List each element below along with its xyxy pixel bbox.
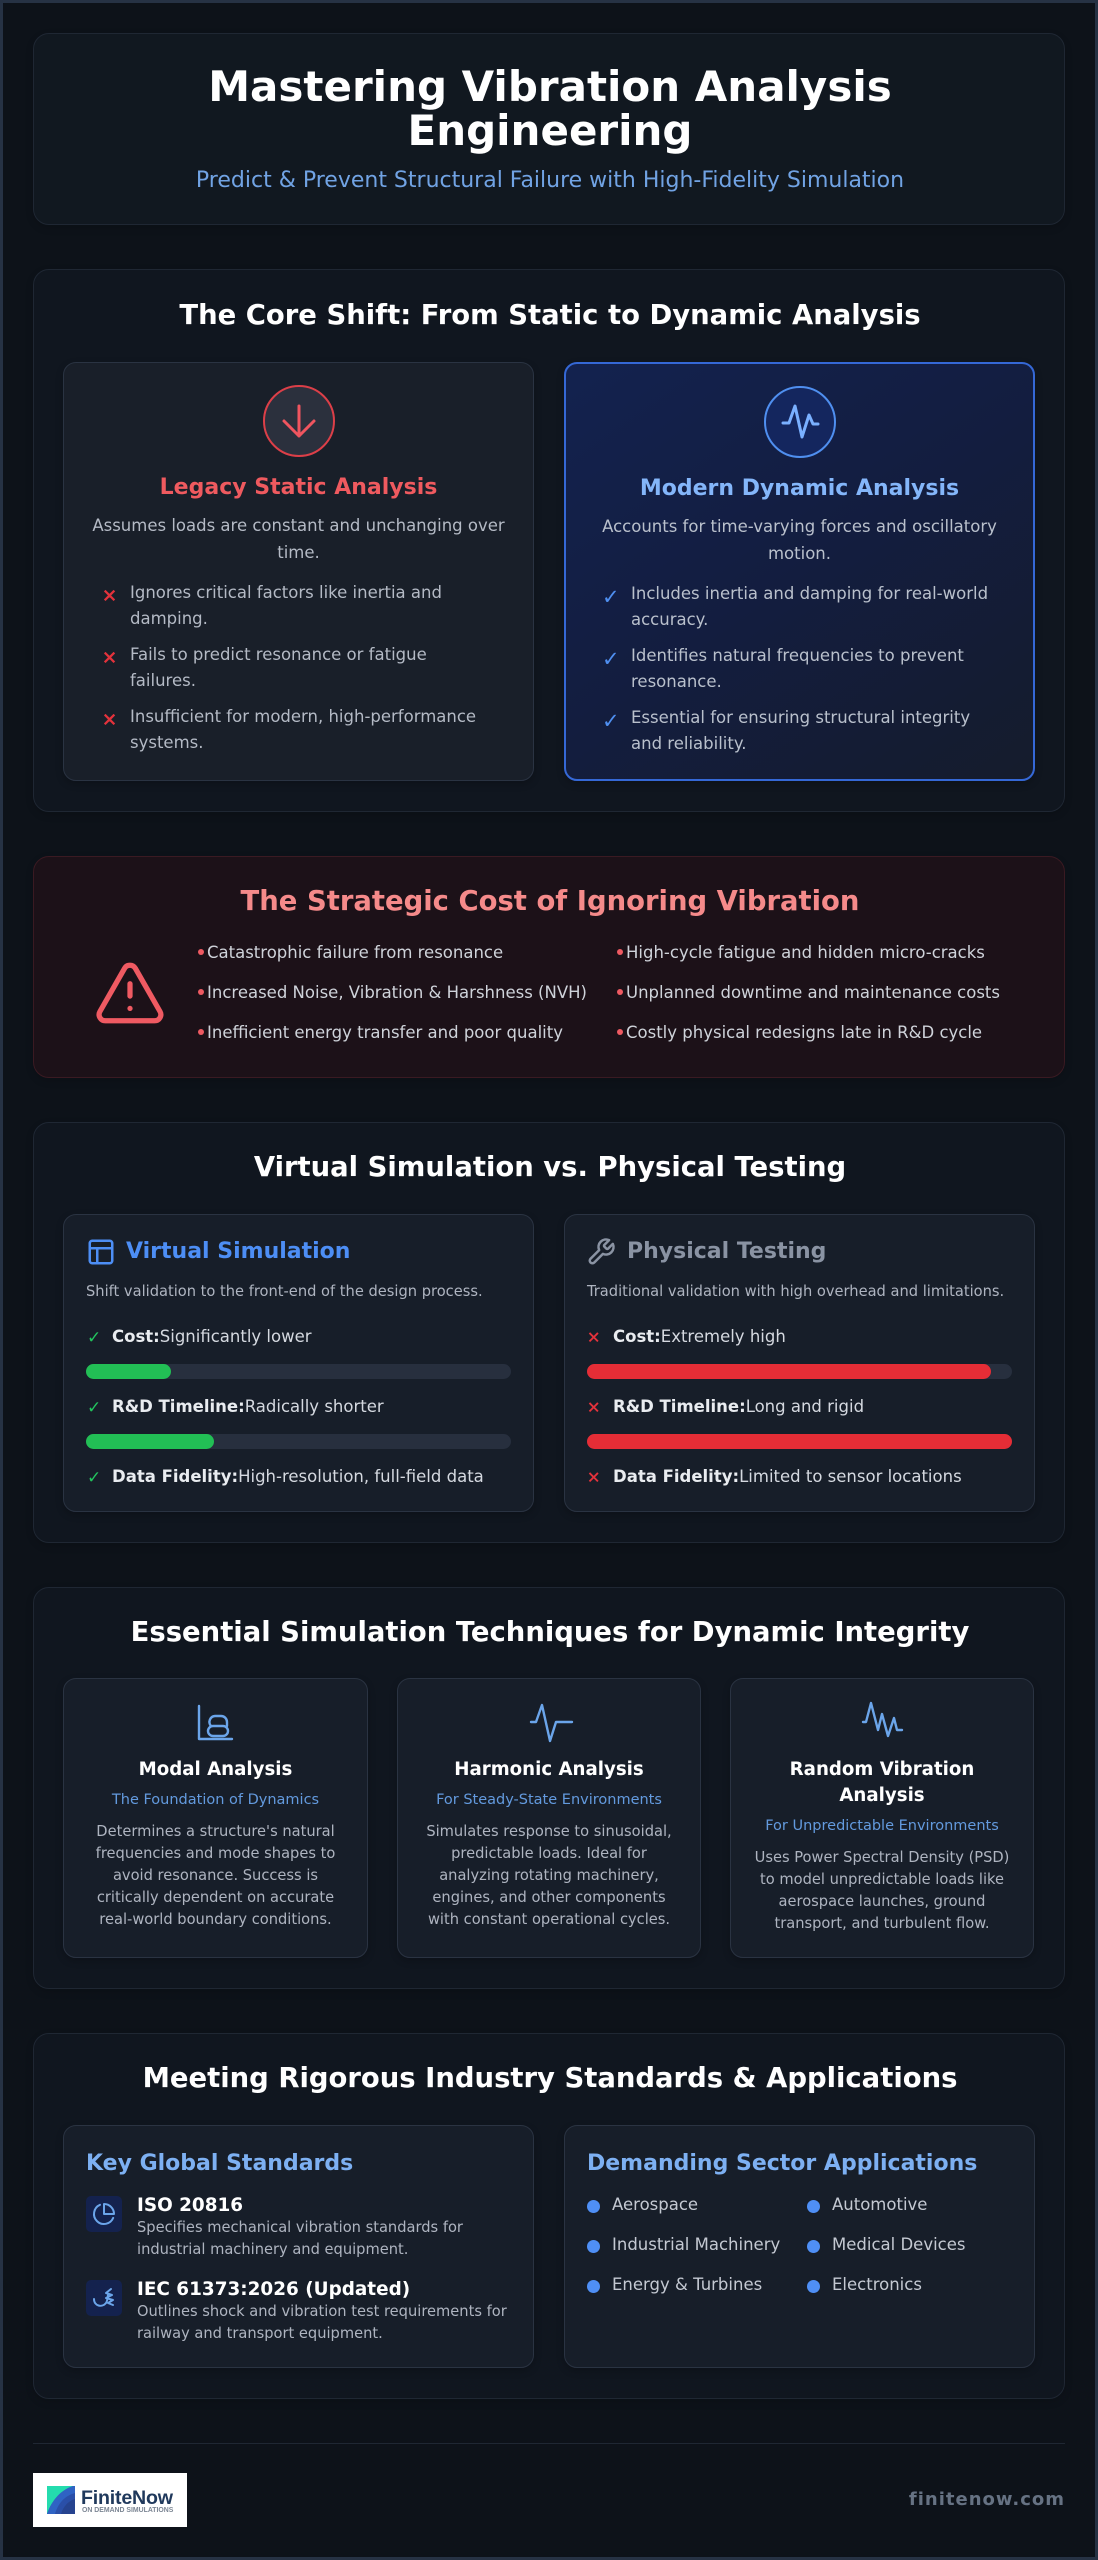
panel: virtual vs physical xyxy=(33,1122,1065,1543)
icon: shock hook xyxy=(86,2280,122,2316)
standard name: ISO 20816 xyxy=(137,2195,243,2216)
list item: damping. xyxy=(130,609,208,628)
sector: medical devices: Medical Devices xyxy=(832,2235,965,2254)
standard description xyxy=(137,2303,507,2342)
technique description: analyzing rotating machinery, xyxy=(439,1867,659,1884)
card: physical testing: ✕ xyxy=(587,1328,600,1347)
technique description: with constant operational cycles. xyxy=(428,1911,670,1928)
card: modern dynamic analysis xyxy=(564,362,1035,781)
technique description: critically dependent on accurate xyxy=(97,1889,334,1906)
sector: automotive xyxy=(807,2193,1007,2217)
standard description: Outlines shock and vibration test requirements for xyxy=(137,2303,507,2320)
list item: Fails to predict resonance or fatigue xyxy=(130,645,427,664)
card: virtual simulation: ✓ xyxy=(87,1468,101,1488)
sector: medical devices xyxy=(807,2233,1007,2257)
sector: aerospace xyxy=(587,2193,787,2217)
card description: Shift validation to the front-end of the design process. xyxy=(86,1283,483,1300)
card: random vibration analysis xyxy=(730,1678,1034,1958)
technique title: Harmonic Analysis xyxy=(454,1759,644,1780)
heading: virtual vs physical: Virtual Simulation vs. Physical Testing xyxy=(254,1152,846,1183)
technique description: to model unpredictable loads like xyxy=(760,1871,1004,1888)
sector: electronics: Electronics xyxy=(832,2275,922,2294)
card: virtual simulation: Data Fidelity:High-resolution, full-field data xyxy=(112,1467,484,1486)
technique description: transport, and turbulent flow. xyxy=(774,1915,989,1932)
card description xyxy=(92,516,505,562)
progress bar: cost xyxy=(86,1364,511,1379)
technique description xyxy=(96,1823,335,1928)
list item: ✕ xyxy=(102,648,117,669)
technique title: Analysis xyxy=(839,1785,925,1806)
progress bar: timeline xyxy=(86,1434,511,1449)
cost item: High-cycle fatigue and hidden micro-cracks xyxy=(626,943,985,962)
progress bar: cost xyxy=(587,1364,1012,1379)
cost item: Costly physical redesigns late in R&D cycle xyxy=(626,1023,982,1042)
sector: energy and turbines: Energy & Turbines xyxy=(612,2275,762,2294)
drawback list xyxy=(102,583,476,752)
sector: aerospace: Aerospace xyxy=(612,2195,698,2214)
icon: layout xyxy=(88,1240,114,1264)
benefit list xyxy=(602,584,988,753)
metric: cost xyxy=(87,1327,312,1348)
list item xyxy=(602,584,988,629)
panel: simulation techniques xyxy=(33,1587,1065,1989)
cost item: Increased Noise, Vibration & Harshness (NVH) xyxy=(207,983,587,1002)
panel: core shift xyxy=(33,269,1065,812)
list item: and reliability. xyxy=(631,734,746,753)
sector: energy and turbines xyxy=(587,2273,787,2297)
technique description: Uses Power Spectral Density (PSD) xyxy=(755,1849,1009,1866)
card: physical testing: ✕ xyxy=(587,1398,600,1417)
sector: industrial machinery: Industrial Machinery xyxy=(612,2235,780,2254)
list item: failures. xyxy=(130,671,196,690)
standard description xyxy=(137,2219,463,2258)
list item: Identifies natural frequencies to prevent xyxy=(631,646,964,665)
list item xyxy=(102,583,442,628)
technique description: avoid resonance. Success is xyxy=(113,1867,318,1884)
website link: finitenow.com xyxy=(909,2489,1065,2510)
card description: time. xyxy=(277,543,320,562)
list item: ✕ xyxy=(102,710,117,731)
standard description: railway and transport equipment. xyxy=(137,2325,383,2342)
icon: warning triangle xyxy=(96,962,164,1024)
list item: ✕ xyxy=(102,586,117,607)
standard: ISO 20816 xyxy=(86,2195,463,2258)
panel: standards and applications xyxy=(33,2033,1065,2399)
technique description: predictable loads. Ideal for xyxy=(451,1845,647,1862)
list item: ✓ xyxy=(602,585,620,609)
card: harmonic analysis xyxy=(397,1678,701,1958)
card: legacy static analysis xyxy=(63,362,534,781)
logo: FiniteNow xyxy=(33,2473,187,2527)
heading: simulation techniques: Essential Simulation Techniques for Dynamic Integrity xyxy=(131,1617,969,1648)
list item: accuracy. xyxy=(631,610,708,629)
technique title: Modal Analysis xyxy=(139,1759,292,1780)
list item xyxy=(602,646,964,691)
metric: fidelity xyxy=(87,1467,484,1488)
header panel xyxy=(33,33,1065,225)
logo wordmark: FiniteNow xyxy=(81,2487,173,2509)
standard description: industrial machinery and equipment. xyxy=(137,2241,408,2258)
technique description: engines, and other components xyxy=(432,1889,666,1906)
subtitle: Predict & Prevent Structural Failure with High-Fidelity Simulation xyxy=(196,168,904,193)
icon: modal chart xyxy=(198,1704,234,1740)
technique description xyxy=(755,1849,1009,1932)
list item: ✓ xyxy=(602,647,620,671)
list item: systems. xyxy=(130,733,204,752)
icon: activity pulse xyxy=(764,386,836,458)
list item: Essential for ensuring structural integrity xyxy=(631,708,970,727)
progress bar: timeline xyxy=(587,1434,1012,1449)
card: demanding sector applications xyxy=(564,2125,1035,2368)
technique description: frequencies and mode shapes to xyxy=(96,1845,335,1862)
technique subtitle: The Foundation of Dynamics xyxy=(112,1792,319,1808)
sector: automotive: Automotive xyxy=(832,2195,927,2214)
cost list xyxy=(198,943,1000,1042)
list item xyxy=(602,708,970,753)
cost item: Unplanned downtime and maintenance costs xyxy=(626,983,1000,1002)
heading: standards and applications: Meeting Rigorous Industry Standards & Applications xyxy=(143,2063,957,2094)
technique description: Simulates response to sinusoidal, xyxy=(426,1823,672,1840)
technique description xyxy=(426,1823,672,1928)
list item xyxy=(102,707,476,752)
panel: strategic cost xyxy=(33,856,1065,1078)
card description: motion. xyxy=(768,544,831,563)
list item: resonance. xyxy=(631,672,722,691)
icon: logo mark xyxy=(47,2486,75,2514)
card: virtual simulation: R&D Timeline:Radically shorter xyxy=(112,1397,384,1416)
card title: Virtual Simulation xyxy=(126,1239,350,1264)
card: virtual simulation xyxy=(63,1214,534,1512)
card description xyxy=(602,517,997,563)
technique subtitle: For Steady-State Environments xyxy=(436,1792,662,1808)
title xyxy=(208,62,892,155)
heading: core shift: The Core Shift: From Static to Dynamic Analysis xyxy=(179,300,921,331)
logo tagline: ON DEMAND SIMULATIONS xyxy=(82,2507,173,2514)
cost item: Inefficient energy transfer and poor quality xyxy=(207,1023,563,1042)
technique description: real-world boundary conditions. xyxy=(99,1911,332,1928)
card title: Legacy Static Analysis xyxy=(160,475,437,500)
icon: wrench xyxy=(588,1238,615,1264)
icon: random wave xyxy=(862,1702,904,1738)
sector: industrial machinery xyxy=(587,2233,787,2257)
technique subtitle: For Unpredictable Environments xyxy=(765,1818,999,1834)
technique title xyxy=(790,1759,974,1806)
icon: pie chart xyxy=(86,2196,122,2232)
card description: Traditional validation with high overhead and limitations. xyxy=(587,1283,1004,1300)
card description: Accounts for time-varying forces and oscillatory xyxy=(602,517,997,536)
list item: ✓ xyxy=(602,709,620,733)
metric: timeline xyxy=(87,1397,384,1418)
icon: down arrow xyxy=(263,385,335,457)
metric: cost xyxy=(587,1327,786,1347)
list item: Ignores critical factors like inertia and xyxy=(130,583,442,602)
heading: strategic cost: The Strategic Cost of Ignoring Vibration xyxy=(241,886,859,917)
card: physical testing xyxy=(564,1214,1035,1512)
card title: Physical Testing xyxy=(627,1239,826,1264)
cost item: Catastrophic failure from resonance xyxy=(207,943,503,962)
technique description: aerospace launches, ground xyxy=(779,1893,985,1910)
list item xyxy=(102,645,427,690)
standard: IEC 61373 xyxy=(86,2279,507,2342)
metric: timeline xyxy=(587,1397,864,1417)
card: virtual simulation: ✓ xyxy=(87,1328,101,1348)
technique title: Random Vibration xyxy=(790,1759,974,1780)
card: physical testing: ✕ xyxy=(587,1468,600,1487)
standard description: Specifies mechanical vibration standards for xyxy=(137,2219,463,2236)
list item: Insufficient for modern, high-performance xyxy=(130,707,476,726)
card: physical testing: Data Fidelity:Limited to sensor locations xyxy=(613,1467,962,1486)
icon: harmonic wave xyxy=(530,1704,574,1742)
technique description: Determines a structure's natural xyxy=(96,1823,335,1840)
card: physical testing: R&D Timeline:Long and rigid xyxy=(613,1397,864,1416)
sector: electronics xyxy=(807,2273,1007,2297)
card: physical testing: Cost:Extremely high xyxy=(613,1327,786,1346)
card: modal analysis xyxy=(63,1678,368,1958)
title: Mastering Vibration Analysis xyxy=(208,62,892,111)
metric: fidelity xyxy=(587,1467,962,1487)
list item: Includes inertia and damping for real-world xyxy=(631,584,988,603)
card: key global standards xyxy=(63,2125,534,2368)
card: virtual simulation: Cost:Significantly lower xyxy=(112,1327,312,1346)
card title: Modern Dynamic Analysis xyxy=(640,476,959,501)
card title: Demanding Sector Applications xyxy=(587,2151,977,2176)
card: virtual simulation: ✓ xyxy=(87,1398,101,1418)
card description: Assumes loads are constant and unchanging over xyxy=(92,516,505,535)
card title: Key Global Standards xyxy=(86,2151,353,2176)
standard name: IEC 61373:2026 (Updated) xyxy=(137,2279,410,2300)
title: Engineering xyxy=(408,106,692,155)
